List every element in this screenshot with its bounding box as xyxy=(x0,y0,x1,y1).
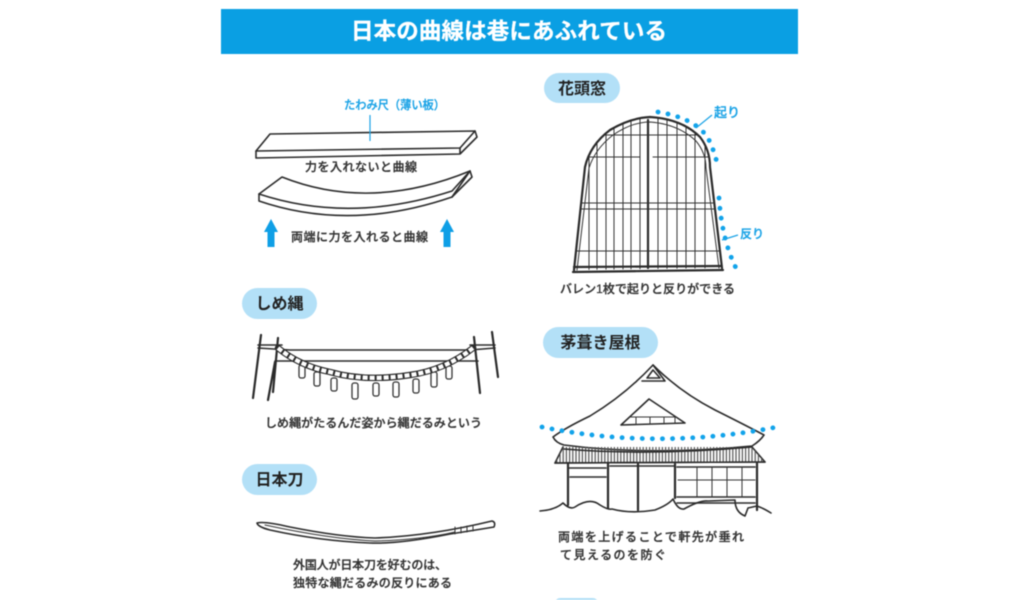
panel: sword xyxy=(242,464,495,590)
window heading: 花頭窓 xyxy=(558,79,606,98)
flat ruler caption: 力を入れないと曲線 xyxy=(305,159,417,174)
panel: ruler diagram xyxy=(256,98,477,247)
shimenawa heading xyxy=(242,288,317,319)
sword caption xyxy=(293,557,452,590)
sword illustration xyxy=(257,521,495,543)
panel: shimenawa xyxy=(242,288,498,430)
panel: kato window xyxy=(544,73,764,296)
window caption: バレン1枚で起りと反りができる xyxy=(560,281,735,296)
label: 起り: 起り xyxy=(714,105,740,120)
left arrow xyxy=(264,219,278,247)
shimenawa heading: しめ縄 xyxy=(255,295,304,313)
roof caption xyxy=(558,529,744,562)
label: 起り xyxy=(696,105,740,128)
bent ruler xyxy=(259,171,472,216)
flat ruler xyxy=(256,131,477,158)
shimenawa illustration xyxy=(253,332,498,400)
panel: thatched roof xyxy=(540,327,782,562)
roof heading xyxy=(543,327,658,358)
window illustration xyxy=(573,117,725,272)
right arrow xyxy=(440,219,454,247)
label: 反り xyxy=(722,227,764,241)
upper curve dots xyxy=(658,112,717,163)
ruler label: たわみ尺（薄い板） xyxy=(344,98,445,112)
house illustration xyxy=(540,365,771,516)
ruler leader line xyxy=(369,115,371,141)
sword heading xyxy=(242,464,317,495)
window heading xyxy=(544,73,620,103)
sword caption: 独特な縄だるみの反りにある xyxy=(293,575,452,590)
eave curve dots xyxy=(542,426,782,439)
roof heading: 茅葺き屋根 xyxy=(560,334,641,352)
title banner xyxy=(221,9,798,54)
shimenawa caption: しめ縄がたるんだ姿から縄だるみという xyxy=(265,415,482,430)
title banner: 日本の曲線は巷にあふれている xyxy=(351,19,667,44)
sword heading: 日本刀 xyxy=(255,471,304,489)
sword caption: 外国人が日本刀を好むのは、 xyxy=(293,557,447,572)
label: 反り: 反り xyxy=(740,227,764,241)
lower curve dots xyxy=(719,198,736,268)
bent ruler caption: 両端に力を入れると曲線 xyxy=(291,229,428,244)
roof caption: 両端を上げることで軒先が垂れ xyxy=(558,529,744,544)
next heading pill (cropped) xyxy=(555,598,598,600)
roof caption: て見えるのを防ぐ xyxy=(560,548,666,562)
